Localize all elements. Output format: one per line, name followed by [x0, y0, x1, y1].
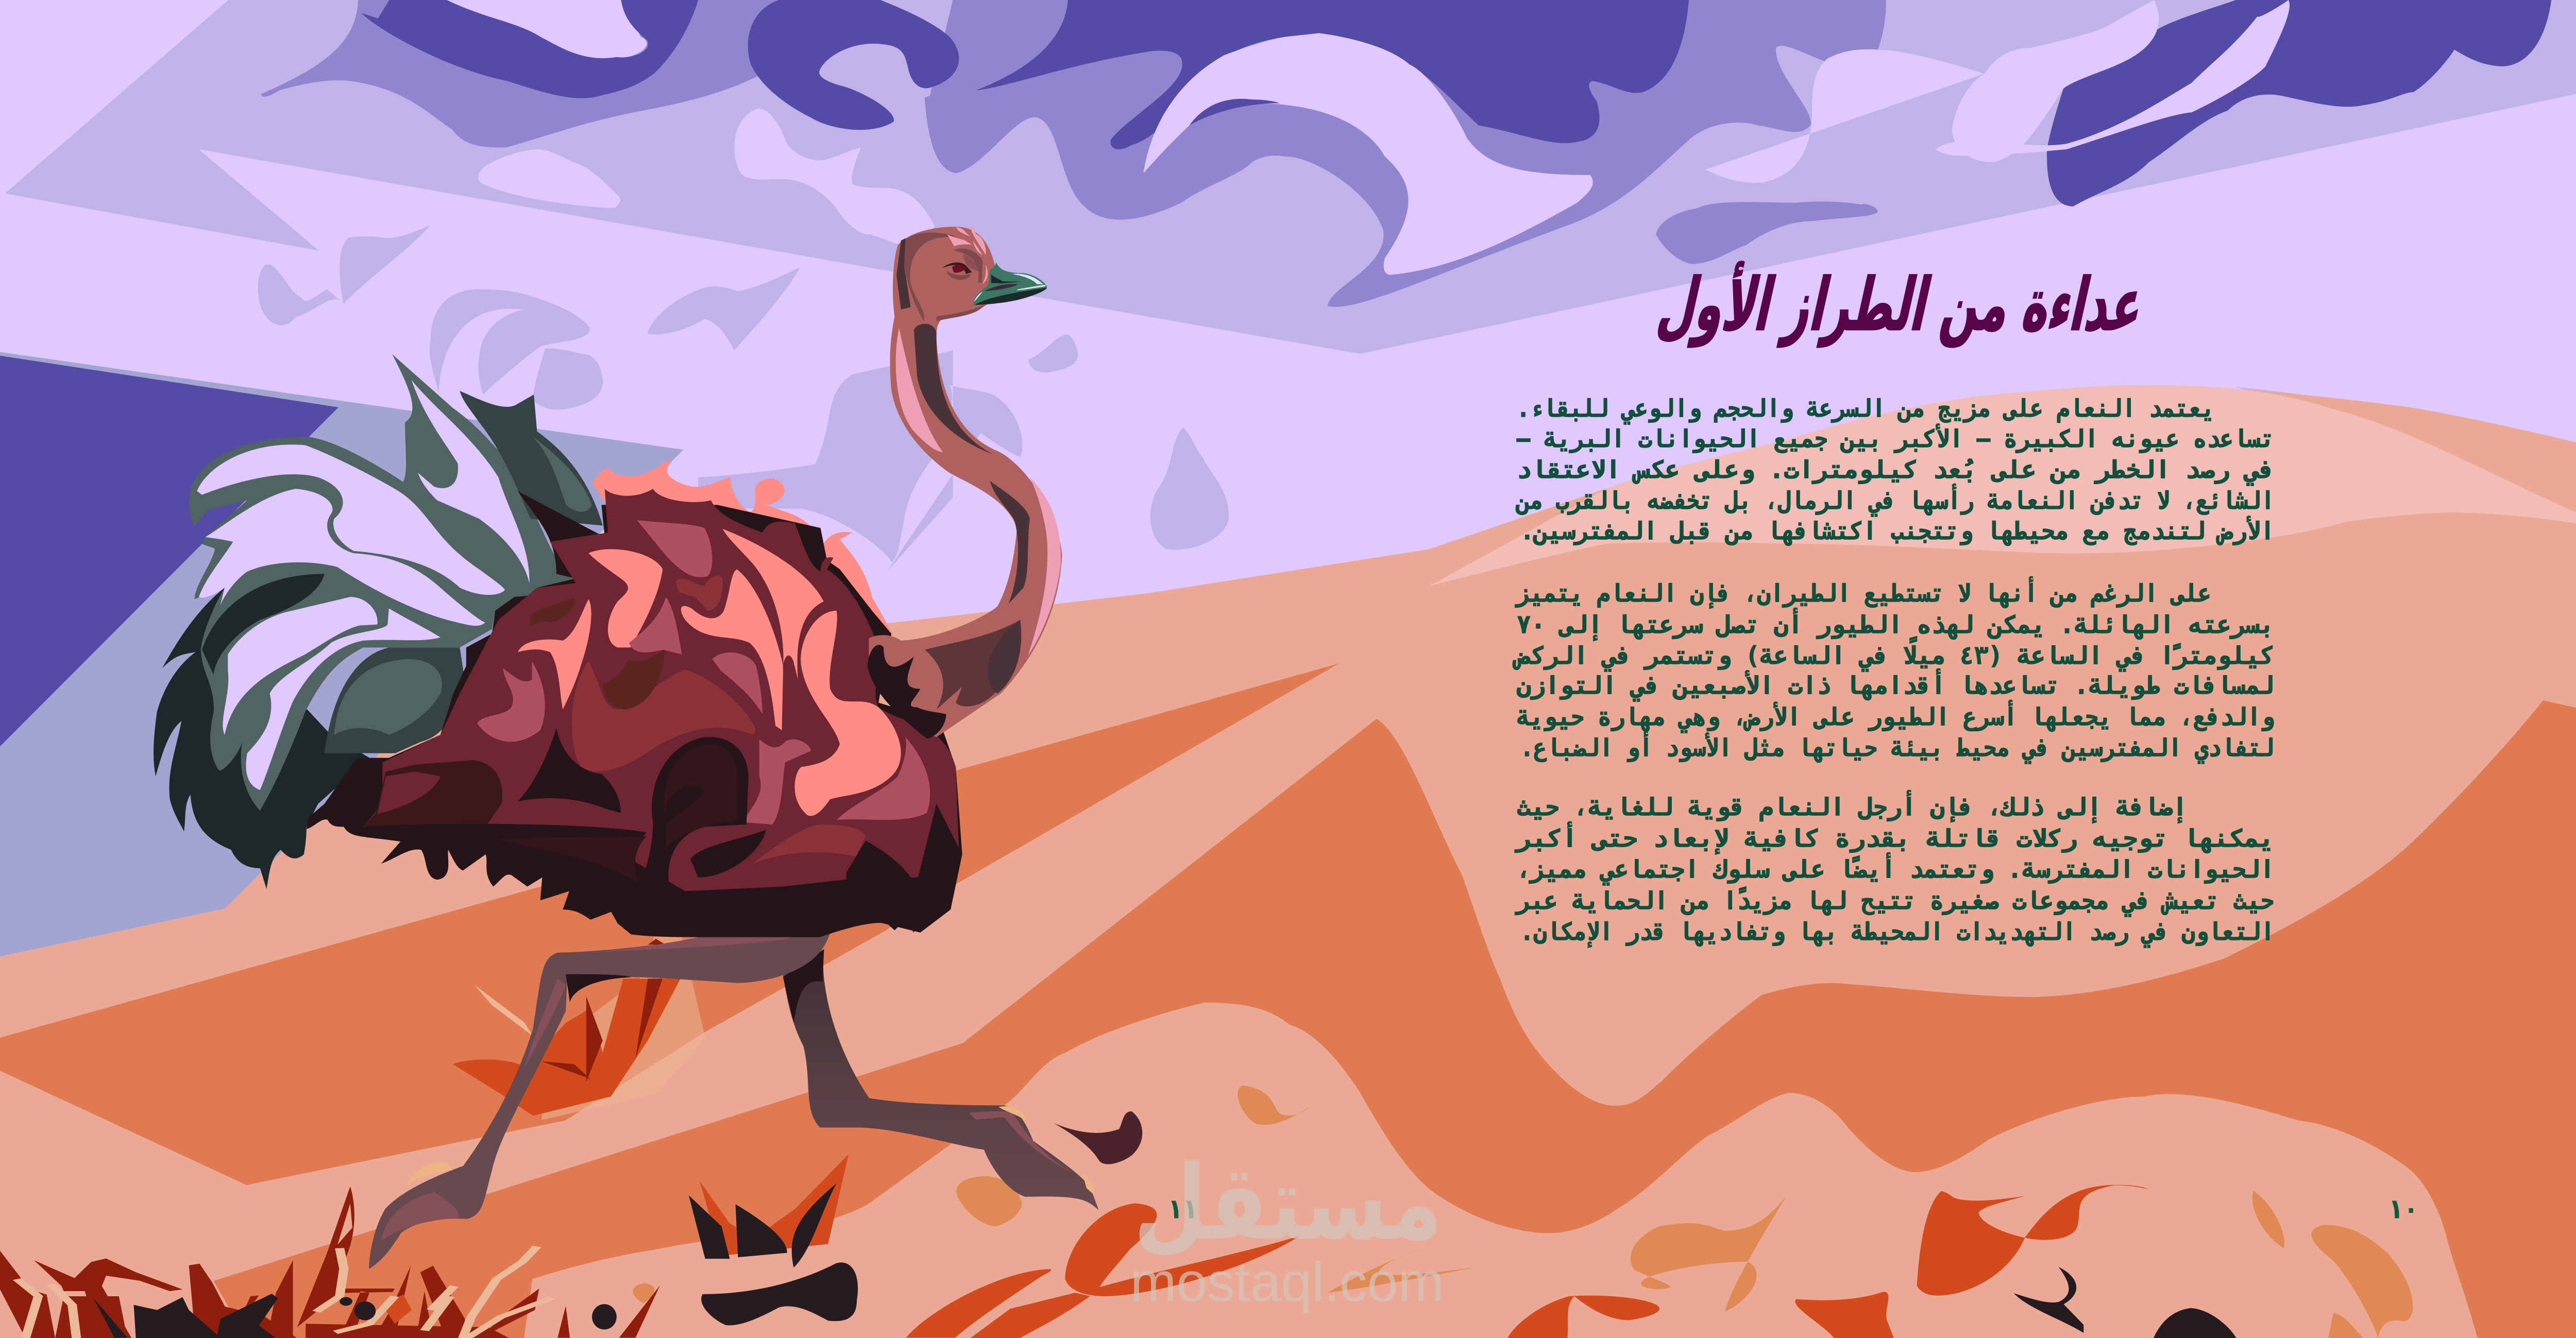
paragraph 2: لتفادي المفترسين في محيط بيئة حياتها مثل الأسود أو الضباع.: [1520, 730, 2274, 764]
ghost feather shapes in the sky: [258, 225, 1229, 571]
paragraph 2: [1513, 576, 2274, 764]
paragraph 2: كيلومترًا في الساعة (٤٣ ميلًا في الساعة) وتستمر في الركض: [1513, 636, 2274, 672]
tail and wing feathers: [154, 354, 603, 889]
neck and shoulder: [868, 227, 1062, 739]
paragraph 1: [1516, 395, 2274, 546]
scattered shapes: bottom right: [970, 1086, 2413, 1338]
paragraph 1: الأرض لتندمج مع محيطها وتتجنب اكتشافها من قبل المفترسين.: [1520, 516, 2274, 546]
paragraph 2: بسرعته الهائلة. يمكن لهذه الطيور أن تصل سرعتها إلى ٧٠: [1517, 607, 2274, 641]
legs: [369, 899, 1099, 1269]
head: eye and beak: [943, 225, 1047, 305]
watermark: mostaql logo: مستقل: [1133, 1143, 1443, 1263]
desert dunes: [0, 385, 2576, 1338]
paragraph 1: الشائع، لا تدفن النعامة رأسها في الرمال، بل تخفضه بالقرب من: [1516, 483, 2274, 517]
paragraph 2: لمسافات طويلة. تساعدها أقدامها ذات الأصبعين في التوازن: [1517, 668, 2274, 702]
ostrich: [154, 225, 1099, 1269]
paragraph 2: على الرغم من أنها لا تستطيع الطيران، فإن النعام يتميز: [1515, 576, 2211, 609]
page number: right page: ١٠: [2388, 1193, 2418, 1225]
paragraph 2: والدفع، مما يجعلها أسرع الطيور على الأرض، وهي مهارة حيوية: [1517, 699, 2274, 733]
scattered desert shapes: [557, 1111, 1142, 1338]
left slate and indigo wedges: [0, 352, 684, 956]
small grass tuft behind legs: [453, 932, 705, 1120]
paragraph 3: إضافة إلى ذلك، فإن أرجل النعام قوية للغاية، حيث: [1517, 790, 2187, 824]
sky: layered lilac clouds: [5, 0, 2576, 354]
watermark: mostaql logo: [1130, 1143, 1444, 1313]
page number: left page: ١١: [1168, 1193, 1198, 1225]
paragraph 3: الحيوانات المفترسة. وتعتمد أيضًا على سلوك اجتماعي مميز،: [1517, 852, 2274, 886]
body plumage: [307, 461, 962, 937]
paragraph 1: يعتمد النعام على مزيج من السرعة والحجم والوعي للبقاء.: [1517, 395, 2215, 425]
watermark: mostaql logo: mostaql.com: [1130, 1251, 1444, 1313]
paragraph 3: التعاون في رصد التهديدات المحيطة بها وتفاديها قدر الإمكان.: [1520, 918, 2274, 948]
paragraph 3: [1514, 790, 2274, 948]
paragraph 3: يمكنها توجيه ركلات قاتلة بقدرة كافية لإبعاد حتى أكبر: [1514, 821, 2274, 854]
grass tuft: bottom centre: [689, 1154, 849, 1267]
paragraph 1: في رصد الخطر من على بُعد كيلومترات. وعلى عكس الاعتقاد: [1517, 456, 2274, 486]
grass tuft: bottom left: [0, 1187, 552, 1338]
paragraph 3: حيث تعيش في مجموعات صغيرة تتيح لها مزيدًا من الحماية عبر: [1515, 886, 2274, 917]
paragraph 1: تساعده عيونه الكبيرة – الأكبر بين جميع الحيوانات البرية –: [1517, 423, 2274, 453]
title: عداءة من الطراز الأول: [1651, 262, 2153, 347]
